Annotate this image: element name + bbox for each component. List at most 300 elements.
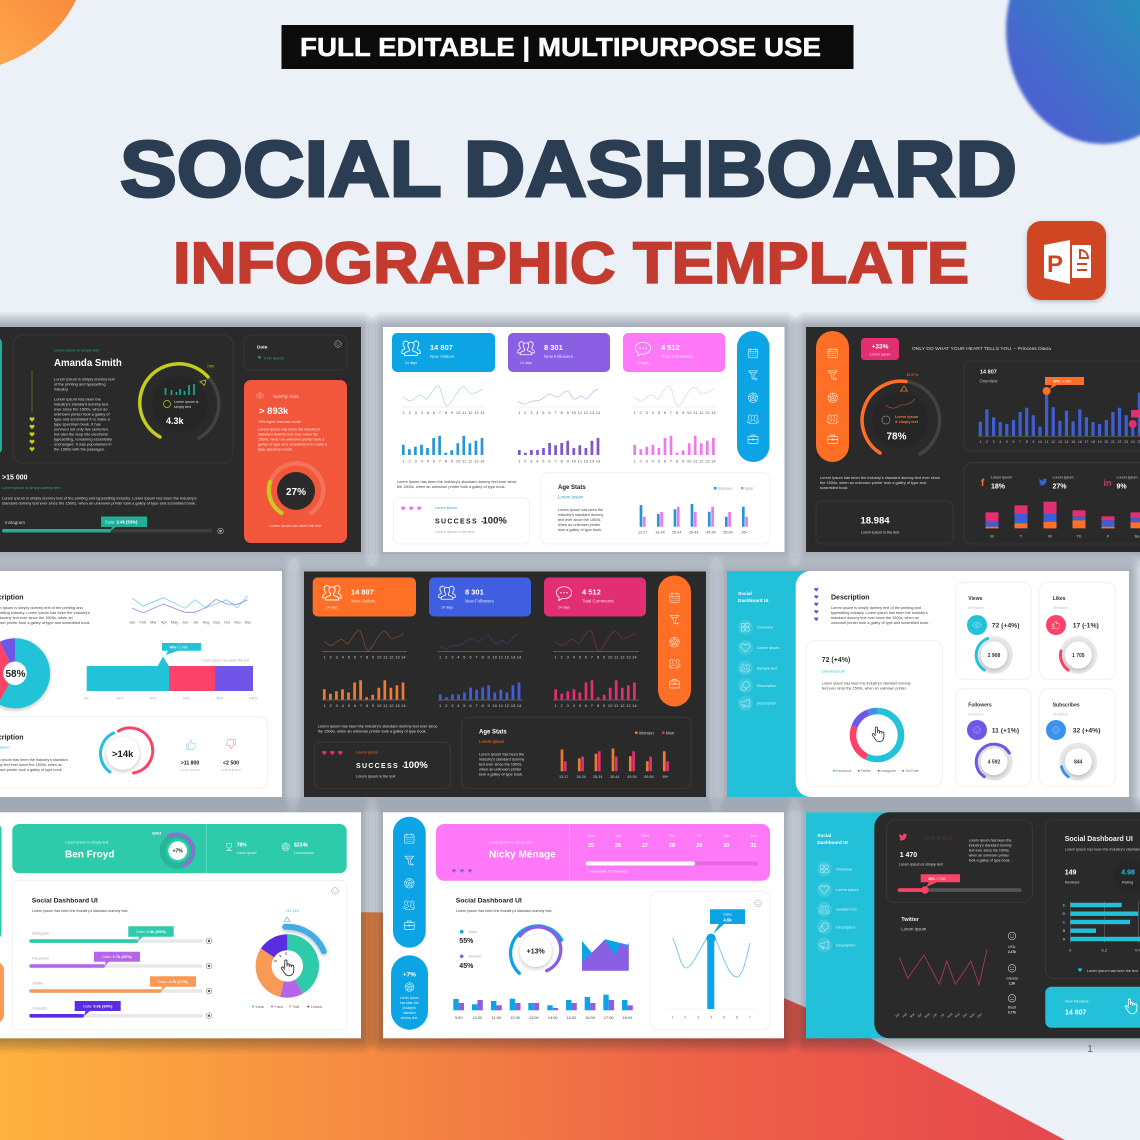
age stats card: [462, 717, 691, 788]
kpi card new visitors: New Visitors: [430, 354, 455, 359]
line chart months: Dec: [245, 620, 251, 624]
slide drop shadows: [0, 327, 1140, 1038]
success card: Lorem Ipsum is the text: [435, 530, 475, 534]
header banner: Ben Froyd: [65, 850, 114, 860]
twitter stat card: 1 470: [900, 852, 917, 859]
side navigation pill: [737, 331, 770, 462]
age stats card: took a galley of type book.: [479, 772, 523, 776]
age stats card: Lorem Ipsum has been the: [558, 508, 603, 512]
banner: full editable: [282, 25, 854, 69]
age stats card: Men: [666, 730, 675, 736]
profile card: the 1960s with the passages.: [54, 447, 105, 452]
age stats card: 55-64: [644, 775, 654, 779]
followers card: Followers: [968, 702, 992, 708]
stacked bar: Lorem Ipsum has been the text: [201, 658, 249, 662]
country stats: 2,47k: [1008, 950, 1016, 954]
profile card: of the printing and typesetting: [54, 382, 106, 386]
age stats card: 25-34: [593, 775, 602, 779]
age stats card: Age Stats: [479, 730, 507, 736]
gauge 4.3k: 4.3k: [166, 416, 185, 426]
gender stats: 55%: [459, 938, 474, 945]
progress bar instagram: Instagram: [5, 520, 25, 525]
kpi card total comments: 4 512: [582, 588, 601, 596]
big donut card: Lorem Ipsum: [822, 668, 846, 674]
orange monthly visits card: > 893k: [259, 406, 289, 417]
sidebar menu: Lorem Ipsum: [757, 645, 779, 650]
profile card: Lorem ipsum is simply text: [54, 348, 100, 352]
orange monthly visits card: [244, 380, 347, 543]
orange monthly visits card: Lorem Ipsum has been the industry's: [258, 428, 320, 432]
twitter line chart: May: [924, 1011, 931, 1019]
progress bars: Instagram: [32, 930, 49, 936]
reviews card: C: [1063, 920, 1066, 924]
country stats: 0,77k: [1008, 1010, 1016, 1014]
orange monthly visits card: 1500s, when an unknown printer took a: [258, 438, 325, 442]
pink header: Mon: [588, 834, 594, 838]
line chart months: Oct: [224, 620, 231, 624]
lower card >14k: Lorem ipsum: [221, 768, 241, 772]
sparkline charts: [401, 386, 718, 415]
description heading and text: [0, 594, 91, 625]
profile card: typesetting, remaining essentially: [54, 437, 112, 442]
twitter line chart: Nov: [969, 1012, 976, 1019]
description text: the 1500s, when an unknown printer took a galley of type book.: [318, 728, 427, 734]
social share card: in: [1104, 478, 1112, 488]
progress bars: Data: 1.7k (41%): [102, 954, 132, 959]
overview bar chart card: Overview: [980, 378, 998, 384]
overview bar chart card: 6: [1013, 440, 1015, 444]
sidebar menu: Social: [817, 833, 831, 838]
overview bar chart card: 7: [1019, 440, 1021, 444]
curve chart card: 5: [723, 1014, 726, 1020]
hourly double bars: 10:00: [473, 1015, 483, 1020]
pink header: [436, 824, 770, 881]
likes card: 09 March: [1053, 606, 1068, 610]
overview bar chart card: 16: [1078, 440, 1082, 444]
profile card: Lorem Ipsum has been the: [54, 397, 102, 402]
lower card >14k: <2 500: [223, 760, 239, 766]
gauge 4.3k: simply text: [174, 405, 191, 409]
twitter line chart: Aug: [946, 1012, 953, 1019]
donut chart with hand: Face: [274, 1005, 283, 1009]
kpi card total comments: 14 days: [637, 361, 649, 365]
header banner: Lorem Ipsum: [237, 851, 257, 855]
dark content panel: [874, 812, 1140, 1038]
profile card: survived not only five centuries,: [54, 427, 109, 432]
stat card 18.984: 18.984: [860, 516, 890, 526]
kpi card new followers: 14 days: [520, 361, 532, 365]
big donut card: Instagram: [880, 769, 896, 773]
hourly double bars: 12:00: [510, 1015, 521, 1020]
kpi card new followers: [429, 578, 531, 616]
overview bar chart card: 22: [1118, 440, 1121, 444]
line chart months: Jul: [193, 620, 198, 624]
quote: ONLY DO WHAT YOUR HEART TELLS YOU. – Princess Diana: [912, 346, 1052, 351]
header banner: +7%: [173, 849, 183, 855]
badge +33%: +33%: [872, 344, 889, 350]
pink header: Wed: [641, 834, 649, 838]
social share card: W: [1048, 534, 1052, 538]
age stats card: 35-44: [689, 530, 698, 534]
age stats card: 65+: [663, 775, 669, 779]
age stats card: Men: [745, 486, 754, 491]
curve chart card: 7: [749, 1014, 752, 1020]
hourly double bars: [453, 995, 633, 1020]
social share card: T: [1020, 534, 1023, 538]
sparkline charts: [322, 630, 639, 700]
age stats card: Lorem Ipsum: [558, 494, 583, 500]
reviews card: 149: [1065, 870, 1076, 876]
decorative orange blob top left: [0, 0, 76, 65]
age stats card: 18-24: [576, 775, 586, 779]
curve chart card: 6: [736, 1014, 739, 1020]
twitter stat card: text ever since the 1500s,: [969, 848, 1010, 852]
twitter stat card: Lorem Ipsum is simply text: [899, 862, 943, 866]
reviews card: Rating: [1122, 880, 1133, 884]
description heading: unknown printer took a galley of type and scrambled book.: [831, 621, 929, 625]
age stats card: Lorem Ipsum: [479, 739, 504, 744]
orange monthly visits card: +6% higher than last month: [258, 420, 301, 424]
kpi card total comments: Total Comments: [661, 354, 694, 359]
stacked bar: 20%: [116, 696, 123, 700]
pink header: Fri: [697, 834, 702, 838]
pink header: 30: [723, 843, 729, 849]
age stats card: text ever since the 1500s,: [558, 518, 601, 522]
big donut card: Lorem Ipsum has been the industry's standard dummy: [822, 682, 911, 686]
pink header: Sat: [724, 834, 729, 838]
reviews card: 0.2: [1102, 948, 1108, 952]
sidebar menu: Lorem Ipsum: [836, 887, 859, 892]
profile card: but also the leap into electronic: [54, 432, 108, 437]
bar charts: 1 2 3 4 5 6 7 8 9 10 11 12 13 14: [518, 458, 601, 464]
lower card >14k: >11 800: [181, 760, 199, 766]
twitter stat card: ☆☆☆☆☆: [924, 834, 954, 842]
gauge 78%: $137%: [907, 373, 919, 377]
twitter line chart: Sep: [954, 1012, 961, 1019]
views card: 72 (+4%): [992, 623, 1019, 630]
followers card: [956, 689, 1031, 786]
profile card: Lorem Ipsum is simply dummy text: [54, 376, 116, 382]
age stats card: industry's standard dummy: [479, 758, 524, 762]
profile card: type and scrambled it to make a: [54, 417, 111, 422]
progress bars: Data: 2.4k (63%): [136, 929, 166, 934]
gauge 78%: Lorem Ipsum: [895, 415, 919, 419]
social share card: M: [990, 534, 994, 538]
overview bar chart card: [964, 361, 1140, 451]
reviews card: B: [1063, 928, 1066, 933]
curve chart card: 4.5k: [723, 918, 732, 922]
kpi card new visitors: New Visitors: [351, 598, 376, 604]
gender stats: 45%: [459, 963, 474, 970]
bar charts: 1 2 3 4 5 6 7 8 9 10 11 12 13 14: [554, 703, 637, 708]
pink header: Nicky Ménage: [489, 850, 556, 860]
sparkline charts: 1 2 3 4 5 6 7 8 9 10 11 12 13 14: [403, 410, 485, 415]
pink header: Lorem ipsum is simply text: [489, 840, 532, 844]
age stats card: took a galley of type book.: [558, 528, 602, 532]
country stats: 1,9k: [1009, 982, 1015, 986]
date card: [244, 335, 347, 370]
line chart months: Sep: [213, 620, 220, 624]
kpi card total comments: 14 days: [558, 606, 570, 610]
donut chart with hand: Twit: [292, 1005, 300, 1009]
country stats: USA:: [1008, 945, 1016, 949]
success card: Lorem ipsum: [435, 506, 457, 510]
twitter line chart: Dec: [976, 1012, 983, 1019]
orange monthly visits card: standard dummy text ever since the: [258, 432, 318, 436]
social share card: Th: [1077, 534, 1081, 538]
sparkline charts: 1 2 3 4 5 6 7 8 9 10 11 12 13 14: [439, 654, 522, 660]
gender stats: Female: [469, 955, 481, 959]
profile card: type specimen book. It has: [54, 422, 101, 427]
reviews card: Reviews: [1065, 880, 1079, 884]
age stats card: 65+: [742, 530, 748, 534]
gauge 4.3k: Lorem ipsum is: [174, 400, 199, 404]
views card: Views: [968, 596, 983, 602]
stacked bar: 49% / 2 986: [170, 646, 188, 650]
gauge +13%: +13%: [527, 948, 546, 956]
overview bar chart card: 18: [1091, 440, 1095, 444]
description text: the 1500s, when an unknown printer took a galley of type book.: [397, 484, 506, 489]
title: SOCIAL DASHBOARD: [120, 124, 1017, 213]
social share card: Lorem Ipsum: [1052, 476, 1073, 480]
hourly double bars: 13:00: [529, 1015, 539, 1020]
hourly double bars: 15:00: [567, 1015, 577, 1020]
curve chart card: 1: [672, 1014, 675, 1020]
success card: 100%: [482, 516, 507, 526]
reviews card: 0: [1069, 948, 1072, 952]
hourly double bars: 16:00: [585, 1015, 596, 1020]
kpi card new followers: 14 days: [441, 606, 453, 610]
donut chart with hand: Linked: [311, 1005, 322, 1009]
success card: SUCCESS -: [356, 763, 406, 770]
sidebar menu: Description: [836, 942, 855, 948]
reviews card: Social Dashboard UI: [1065, 836, 1133, 843]
panel: slide 6 description cards: [727, 571, 1129, 797]
panel: slide 9 Twitter dark: [806, 812, 1140, 1038]
social share card: [964, 463, 1140, 544]
bar charts: [402, 436, 716, 464]
age stats card: industry's standard dummy: [558, 513, 603, 517]
donut chart with hand: Insta: [256, 1005, 265, 1009]
overview bar chart card: 2: [986, 440, 988, 444]
decorative blue blob top right: [1006, 0, 1140, 144]
progress bars: Facebook: [32, 956, 49, 960]
bar charts: 1 2 3 4 5 6 7 8 9 10 11 12 13 14: [439, 703, 522, 708]
gender stats: [459, 930, 481, 970]
kpi card new followers: 8 301: [544, 343, 563, 352]
twitter line chart: Feb: [901, 1012, 908, 1019]
bar charts: [324, 680, 637, 708]
profile card: ever since the 1500s, when an: [54, 407, 107, 412]
panel: slide 7 Ben Froyd: [0, 812, 361, 1038]
stat text 15 000: >15 000: [2, 474, 28, 482]
orange monthly visits card: type specimen book.: [258, 448, 293, 452]
profile card: industry.: [54, 386, 69, 392]
progress bar instagram: [2, 516, 223, 534]
bar charts: 1 2 3 4 5 6 7 8 9 10 11 12 13 14: [324, 703, 406, 708]
overview bar chart card: 11: [1045, 440, 1048, 444]
description heading: typesetting industry. Lorem Ipsum has been the industry's: [831, 611, 928, 615]
overview bar chart card: 5: [1006, 440, 1008, 444]
date card: Date: [257, 344, 268, 350]
gauge 4.3k: 73%: [207, 364, 214, 368]
kpi card new visitors: 14 days: [405, 361, 417, 365]
line chart months: Aug: [203, 620, 209, 624]
reviews card: D: [1063, 911, 1066, 916]
stat text 15 000: Lorem Ipsum is simply dummy text of the printing and typesetting industry. Lorem Ipsum has been the industry's: [2, 496, 197, 500]
page number: 1: [1087, 1043, 1093, 1055]
orange monthly visits card: Lorem Ipsum has been the text: [269, 524, 322, 528]
reviews card: E: [1063, 902, 1066, 908]
side navigation pill: [816, 331, 849, 462]
twitter stat card: industry's standard dummy: [969, 844, 1012, 848]
sidebar menu: Description: [757, 683, 776, 688]
social share card: Lorem Ipsum: [991, 476, 1012, 480]
profile card: industry's standard dummy text: [54, 402, 109, 407]
header banner: Lorem ipsum is simply text: [65, 840, 108, 844]
overview bar chart card: 47% / 4 32K: [1053, 380, 1072, 384]
donut 58%: [0, 650, 38, 697]
progress bars: Data: 0.6k (30%): [83, 1004, 113, 1008]
kpi card new followers: 8 301: [465, 588, 484, 596]
followers card: 11 (+1%): [992, 728, 1019, 734]
panel: slide 8 Nicky Menage: [383, 812, 784, 1038]
+7% pill: has been the: [400, 1001, 419, 1005]
followers card: 4 592: [988, 760, 1000, 766]
twitter line chart: [894, 917, 987, 1019]
likes card: 17 (-1%): [1073, 623, 1099, 630]
country stats: [1006, 932, 1018, 1014]
reviews card: A: [1063, 936, 1066, 942]
social share card: Sa: [1135, 534, 1140, 538]
progress bars: Data: 2.7k (71%): [158, 979, 188, 984]
overview bar chart card: 23: [1124, 440, 1128, 444]
description heading: [814, 588, 929, 625]
progress bars: [29, 926, 212, 1018]
line chart months: [129, 596, 251, 624]
gauge 78%: [862, 373, 940, 454]
kpi card new visitors: 14 days: [326, 606, 338, 610]
pink header: Lorem ipsum is simply text: [587, 870, 628, 874]
twitter line chart: Oct: [962, 1012, 968, 1018]
curve chart card: 4: [710, 1014, 713, 1020]
banner: full editable: FULL EDITABLE | MULTIPURPOSE USE: [300, 34, 821, 62]
twitter stat card: 49% / 2 986: [928, 877, 946, 881]
big donut card: Facebook: [836, 769, 852, 773]
kpi card total comments: 4 512: [661, 343, 680, 352]
twitter line chart: Apr: [917, 1012, 923, 1018]
kpi card new visitors: [313, 578, 416, 616]
overview bar chart card: 8: [1026, 440, 1028, 444]
pink header: 31: [750, 843, 756, 849]
kpi card new followers: [508, 333, 610, 372]
age stats card: 13-17: [559, 775, 568, 779]
age stats card: 18-24: [655, 530, 665, 534]
overview bar chart card: 3: [993, 440, 995, 444]
dashboard card: Social Dashboard UI: [32, 898, 98, 904]
sidebar menu: [738, 591, 779, 711]
badge +33%: [861, 338, 899, 360]
line chart months: Nov: [234, 620, 241, 624]
pink header: 27: [642, 843, 648, 849]
line chart months: Jun: [182, 620, 188, 624]
description heading: standard dummy text ever since the 1500s, when an: [831, 616, 919, 620]
decorative bottom gradient wave: [0, 912, 1065, 1140]
sidebar menu: Dashboard UI: [738, 598, 768, 603]
stat card 18.984: [816, 501, 953, 544]
sidebar menu: Overview: [757, 625, 773, 630]
sparkline charts: 1 2 3 4 5 6 7 8 9 10 11 12 13 14: [518, 410, 601, 415]
+7% pill: +7%: [403, 972, 416, 978]
kpi card total comments: Total Comments: [582, 598, 615, 604]
twitter line chart: Jul: [939, 1012, 945, 1018]
header banner: 78%: [237, 842, 247, 848]
big donut card: Twitter: [860, 769, 872, 773]
area chart: [582, 939, 629, 971]
white content panel: [796, 571, 1129, 797]
success card: SUCCESS -: [435, 518, 485, 526]
big donut card: 72 (+4%): [822, 657, 850, 664]
heading: Lorem Ipsum has been the industry's standard dummy text.: [456, 909, 553, 913]
big donut card: YouTube: [905, 769, 919, 773]
gauge 4.3k: [140, 364, 219, 438]
pink header: Thu: [669, 834, 675, 838]
country stats: Canada: [1006, 976, 1018, 980]
age stats card: Women: [718, 486, 733, 491]
age stats card: 55-64: [723, 530, 733, 534]
views card: 09 March: [968, 606, 984, 610]
date card: 07th March: [264, 356, 284, 360]
profile card: unchanged. It was popularised in: [54, 442, 112, 447]
views card: 2 908: [988, 653, 1000, 659]
age stats card: [541, 473, 770, 544]
twitter line chart: Jun: [932, 1012, 938, 1018]
description heading: Lorem Ipsum is simply dummy text of the printing and: [831, 606, 921, 610]
sidebar menu: Description: [836, 924, 855, 930]
sidebar menu: Social: [738, 591, 752, 596]
new reviews card: New Reviews: [1065, 998, 1089, 1004]
lower card >14k: [0, 717, 268, 788]
hourly double bars: 18:00: [623, 1015, 633, 1020]
dashboard card: Lorem Ipsum has been the industry's standard dummy text.: [32, 909, 129, 913]
hourly double bars: 17:00: [604, 1015, 614, 1020]
sidebar menu: Sample text: [757, 665, 778, 670]
gauge 78%: & simply text: [895, 420, 919, 424]
sparkline charts: 1 2 3 4 5 6 7 8 9 10 11 12 13 14: [324, 654, 406, 660]
age stats card: 45-54: [627, 775, 637, 779]
new reviews card: 14 807: [1065, 1010, 1087, 1016]
followers card: 09 March: [968, 712, 984, 716]
donut 58%: 58%: [5, 669, 26, 680]
description text: Lorem Ipsum has been the industry's standard dummy text ever since: [820, 475, 940, 480]
+7% pill: dummy text.: [401, 1016, 418, 1020]
sparkline charts: 1 2 3 4 5 6 7 8 9 10 11 12 13 14: [633, 410, 716, 415]
curve chart card: Data: [723, 912, 732, 916]
kpi card total comments: [623, 333, 725, 372]
kpi card new followers: New Followers: [544, 354, 574, 359]
stacked bar: 60%: [183, 696, 190, 700]
age stats card: 13-17: [638, 530, 647, 534]
line chart months: Jan: [129, 620, 135, 624]
overview bar chart card: 19: [1098, 440, 1102, 444]
hourly double bars: 9:00: [455, 1015, 463, 1020]
overview bar chart card: 14 807: [980, 370, 997, 376]
twitter stat card: [887, 820, 1032, 902]
progress bars: LinkedIn: [32, 1005, 47, 1010]
twitter line chart: Jan: [894, 1012, 901, 1018]
header banner: $234k: [294, 842, 308, 848]
lower card >14k: Lorem ipsum: [180, 768, 200, 772]
